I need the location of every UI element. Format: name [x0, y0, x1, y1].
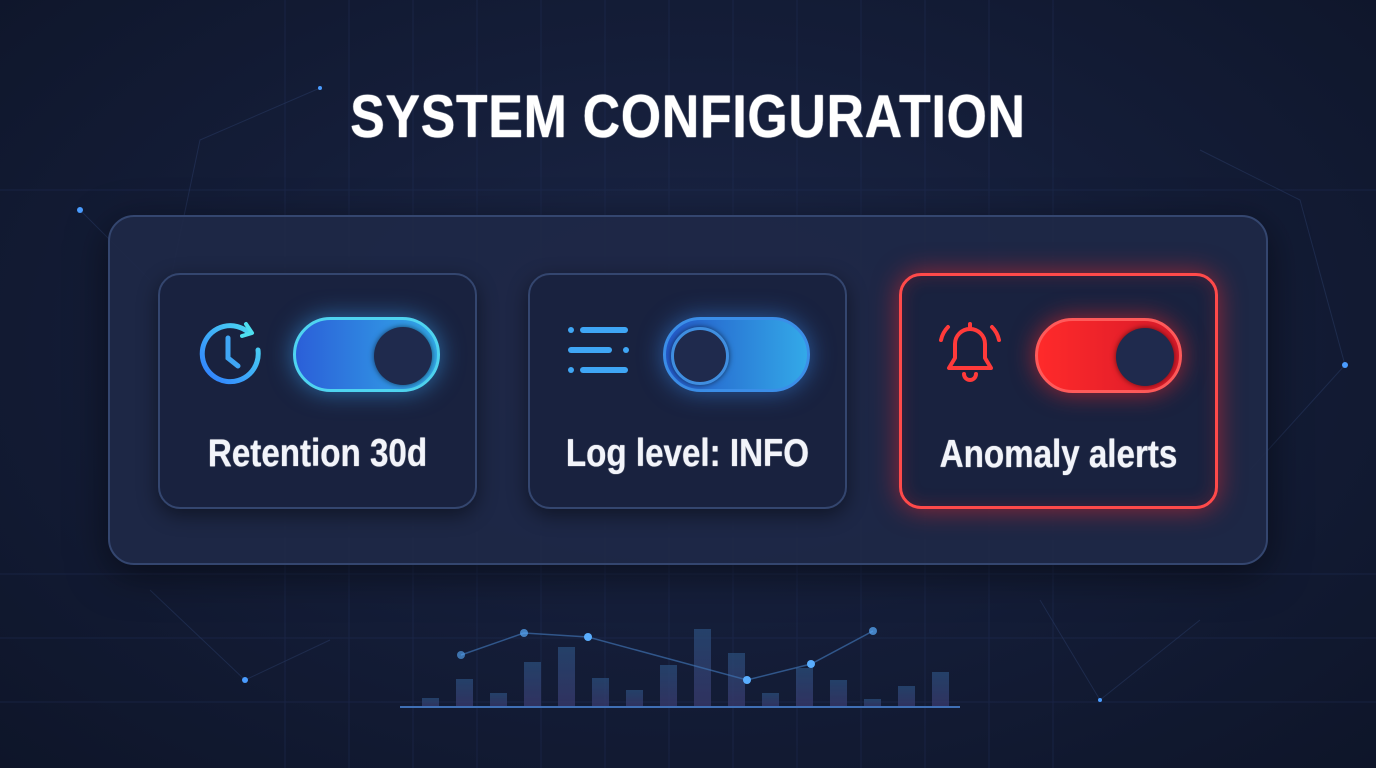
bar chart [400, 627, 960, 707]
label: Log level: INFO [566, 432, 809, 475]
label: Anomaly alerts [940, 433, 1177, 476]
panel: settings [108, 215, 1268, 565]
card: log level [528, 273, 847, 509]
icon: clock [200, 322, 261, 384]
card: anomaly alerts [899, 273, 1218, 509]
toggle: off [663, 317, 810, 392]
card: retention [158, 273, 477, 509]
title: SYSTEM CONFIGURATION [350, 83, 1026, 150]
label: Retention 30d [208, 432, 427, 475]
icon: bell [939, 322, 1001, 382]
icon: list [568, 327, 629, 373]
toggle: on [293, 317, 440, 392]
toggle: alert on [1035, 318, 1182, 393]
